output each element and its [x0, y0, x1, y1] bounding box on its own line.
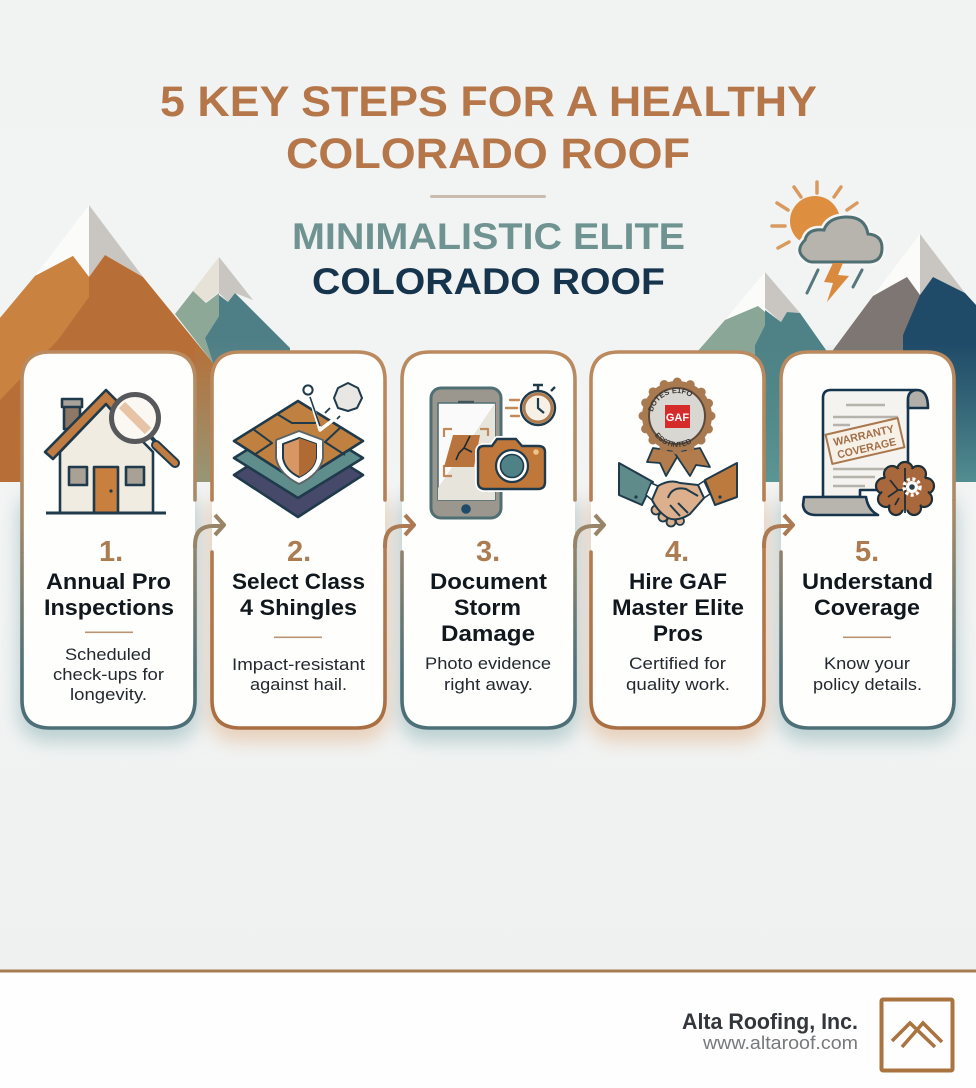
title: COLORADO ROOF	[286, 130, 690, 178]
footer	[0, 970, 976, 1088]
step heading: Inspections	[44, 595, 174, 620]
step heading: 4 Shingles	[240, 595, 357, 620]
left mountains	[0, 205, 290, 482]
divider	[85, 632, 133, 633]
subtitle	[292, 216, 685, 302]
title divider	[430, 195, 546, 198]
step description: Impact-resistant	[232, 655, 365, 674]
step description	[232, 655, 365, 694]
step heading	[430, 569, 548, 646]
arrow: step 2 to 3	[385, 515, 414, 548]
icon: warranty document with brain: WARRANTY	[832, 423, 896, 449]
step description: Certified for	[629, 654, 726, 673]
step description: Know your	[824, 654, 910, 673]
title	[160, 78, 817, 178]
right mountains	[690, 234, 976, 482]
step description: right away.	[444, 675, 533, 694]
arrow: step 1 to 2	[195, 515, 224, 548]
icon: GAF badge with handshake: GAF	[666, 412, 689, 424]
divider	[274, 636, 322, 638]
divider	[843, 636, 891, 638]
step description: longevity.	[70, 685, 147, 704]
icon: layered shingles with shield and hail	[234, 383, 363, 517]
step description	[53, 645, 164, 704]
icon: GAF badge with handshake: DOTES E1FO	[648, 388, 692, 412]
step description	[813, 654, 922, 694]
step heading: Storm	[454, 595, 521, 620]
arrow: step 3 to 4	[575, 515, 604, 548]
subtitle: COLORADO ROOF	[312, 261, 665, 302]
icon: GAF badge with handshake: ESSTINTED	[654, 432, 691, 448]
step heading: Understand	[802, 569, 933, 594]
panel: step 3 document storm damage	[402, 352, 575, 728]
icon: phone, camera and stopwatch	[431, 385, 555, 518]
step heading: Annual Pro	[46, 569, 171, 594]
step description: check-ups for	[53, 665, 164, 684]
icon: house with magnifying glass	[45, 390, 175, 513]
website: www.altaroof.com	[702, 1032, 858, 1053]
step description: Scheduled	[65, 645, 151, 664]
icon: warranty document with brain: COVERAGE	[836, 436, 897, 461]
step heading: Coverage	[814, 595, 920, 620]
step heading: Hire GAF	[629, 569, 727, 594]
step number: 3.	[476, 536, 500, 568]
step description: policy details.	[813, 675, 922, 694]
step description	[626, 654, 730, 694]
step heading: Document	[430, 569, 548, 594]
panel: step 5 understand coverage	[781, 352, 954, 728]
step number: 4.	[665, 536, 689, 568]
company name: Alta Roofing, Inc.	[682, 1009, 858, 1034]
step description: Photo evidence	[425, 654, 551, 673]
icon: warranty document with brain	[803, 390, 934, 515]
icon: GAF badge with handshake	[618, 378, 738, 528]
panel: step 2 select class 4 shingles	[212, 352, 385, 728]
logo: roof mark	[882, 1000, 952, 1070]
step heading	[44, 569, 174, 620]
step heading	[232, 569, 365, 620]
step heading: Damage	[441, 621, 535, 646]
panel: step 1 annual pro inspections	[22, 352, 195, 728]
step number: 1.	[99, 536, 123, 568]
arrow: step 4 to 5	[764, 515, 793, 548]
title: 5 KEY STEPS FOR A HEALTHY	[160, 78, 817, 126]
step number: 5.	[855, 536, 879, 568]
card shadows	[18, 490, 958, 742]
step heading: Pros	[653, 621, 703, 646]
step heading: Select Class	[232, 569, 365, 594]
panel: step 4 hire GAF master elite pros	[589, 350, 766, 730]
step heading	[802, 569, 933, 620]
subtitle: MINIMALISTIC ELITE	[292, 216, 685, 257]
step description: against hail.	[250, 675, 347, 694]
step description	[425, 654, 551, 694]
weather icon: sun, storm cloud and lightning	[772, 182, 882, 302]
step description: quality work.	[626, 675, 730, 694]
step heading: Master Elite	[612, 595, 744, 620]
step number: 2.	[287, 536, 311, 568]
step heading	[612, 569, 744, 646]
